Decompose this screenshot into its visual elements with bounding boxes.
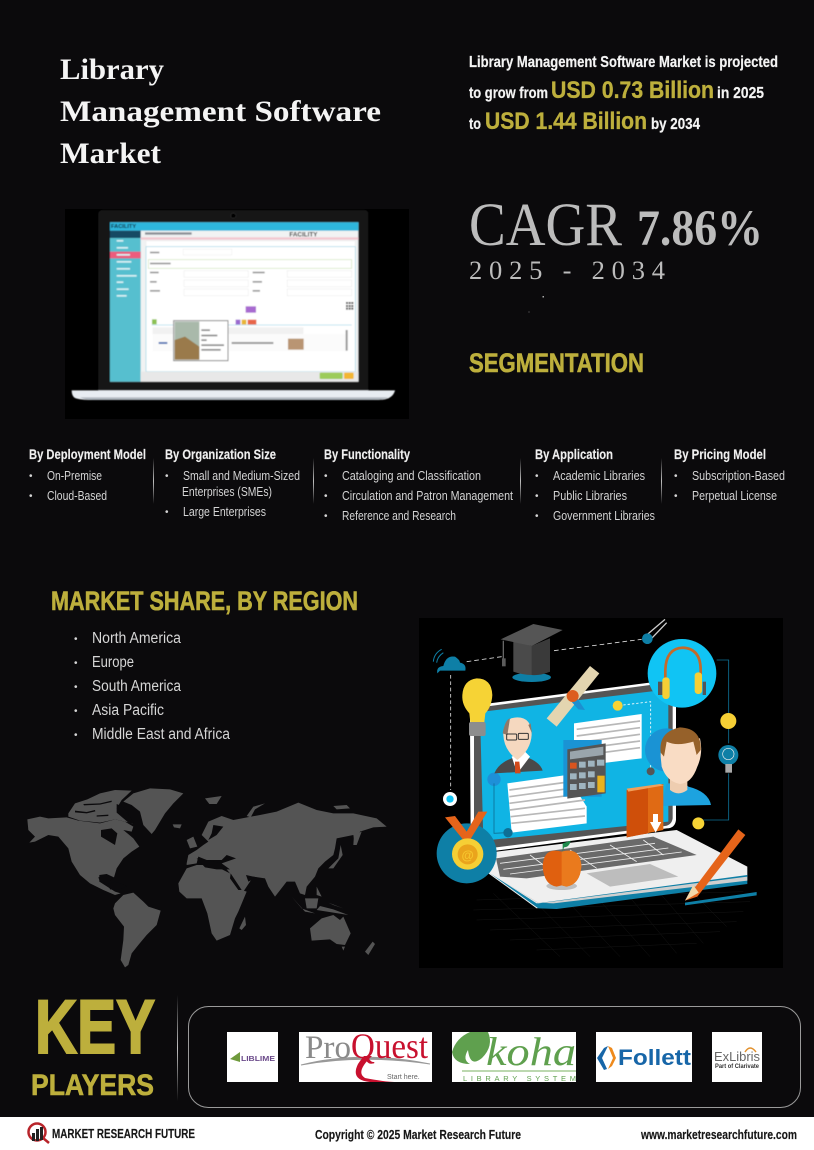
icon: teacher [494, 717, 543, 773]
icon: student [628, 727, 711, 807]
world map [27, 788, 387, 967]
logo: Koha [452, 1029, 576, 1083]
logo: Ex Libris: ExLibris [714, 1049, 760, 1064]
CAGR: CAGR [469, 192, 622, 259]
laptop lid: FACILITY [111, 224, 136, 230]
title: Library [60, 53, 164, 86]
icon: light bulb [462, 678, 492, 736]
segment: organization size: Small and Medium-Sized [183, 469, 300, 483]
icon: diploma scroll [547, 666, 599, 727]
segment: application: Public Libraries [553, 489, 627, 503]
segment: application [535, 446, 655, 523]
icon: pencil [685, 829, 757, 905]
region list: Asia Pacific [92, 702, 164, 719]
logo: ProQuest [299, 1026, 432, 1082]
segment: application: Academic Libraries [553, 469, 645, 483]
segment: functionality: Cataloging and Classification [342, 469, 481, 483]
icon: cloud with wifi and dashed links [433, 639, 642, 806]
heading: segmentation: SEGMENTATION [469, 348, 644, 378]
segment: pricing model: Subscription-Based [692, 469, 785, 483]
market projection text: to [469, 116, 481, 133]
region list: North America [92, 630, 181, 647]
segment: deployment model: • [29, 471, 33, 482]
icon: yellow coin [720, 713, 736, 729]
logo: Koha: koha [486, 1029, 576, 1074]
icon: apple [543, 841, 581, 890]
icon: headphones [648, 639, 729, 820]
market projection text [469, 54, 778, 135]
segment: organization size: Large Enterprises [183, 505, 266, 519]
segment: functionality: Reference and Research [342, 509, 456, 523]
laptop [470, 680, 747, 909]
segment: organization size: Enterprises (SMEs) [182, 485, 272, 499]
segment: organization size: • [165, 471, 169, 482]
documents [507, 714, 642, 833]
region list: Europe [92, 654, 134, 671]
region list: Middle East and Africa [92, 726, 230, 743]
dots and links [487, 701, 655, 837]
market projection text: by 2034 [651, 116, 700, 133]
icon: calculator [563, 740, 606, 799]
segment: pricing model: • [674, 491, 678, 502]
icon: medal: @ [461, 848, 474, 862]
title [60, 53, 381, 170]
region list [74, 630, 230, 743]
logo: ProQuest: Quest [351, 1026, 428, 1066]
logo: Ex Libris [712, 1032, 762, 1082]
region list: • [74, 658, 78, 669]
heading: key players: KEY [35, 985, 155, 1070]
segment: deployment model: Cloud-Based [47, 489, 107, 503]
logo: ProQuest: Pro [305, 1030, 351, 1066]
segment: pricing model [674, 446, 785, 503]
market projection text: to grow from [469, 85, 548, 102]
segment: organization size: • [165, 507, 169, 518]
segment: functionality: By Functionality [324, 446, 410, 462]
market projection text: in 2025 [717, 85, 764, 102]
logo: Ex Libris: Part of Clarivate [715, 1064, 760, 1070]
logo: Koha: LIBRARY SYSTEM [463, 1074, 576, 1083]
segment: functionality: Circulation and Patron Management [342, 489, 513, 503]
logo: LibLime: LIBLIME [241, 1056, 275, 1063]
region list: • [74, 682, 78, 693]
segment: application: Government Libraries [553, 509, 655, 523]
icon: pin [642, 619, 667, 644]
segment: pricing model: • [674, 471, 678, 482]
heading: key players: PLAYERS [31, 1069, 154, 1102]
CAGR [469, 192, 763, 285]
icon: book download [627, 784, 664, 837]
icon: medal [437, 812, 497, 883]
segment: application: • [535, 511, 539, 522]
logo: Follett [596, 1032, 692, 1082]
market projection text: USD 1.44 Billion [485, 108, 647, 135]
segment: organization size: By Organization Size [165, 446, 276, 462]
footer: Copyright © 2025 Market Research Future [315, 1128, 521, 1142]
CAGR: 7.86% [637, 201, 763, 257]
segment: application: • [535, 471, 539, 482]
laptop base [72, 390, 395, 400]
segment: functionality [324, 446, 513, 523]
segment: deployment model: By Deployment Model [29, 446, 146, 462]
segment: functionality: • [324, 491, 328, 502]
panel: laptop screenshot [65, 209, 409, 419]
panel: education laptop illustration [419, 618, 783, 968]
CAGR: 2025 - 2034 [469, 255, 665, 285]
logo: Follett: Follett [618, 1045, 692, 1070]
segment: functionality: • [324, 471, 328, 482]
region list: South America [92, 678, 181, 695]
segment: deployment model: • [29, 491, 33, 502]
region list: • [74, 730, 78, 741]
footer: MARKET RESEARCH FUTURE [52, 1127, 195, 1141]
segment: deployment model: On-Premise [47, 469, 102, 483]
region list: • [74, 634, 78, 645]
title: Market [60, 137, 161, 170]
logo: ProQuest: Start here. [387, 1074, 420, 1081]
region list: • [74, 706, 78, 717]
floor grid [473, 892, 750, 957]
icon: graduation cap [501, 624, 563, 682]
laptop lid: FACILITY [289, 231, 318, 238]
segment: application: • [535, 491, 539, 502]
panel: key players logos [188, 1006, 800, 1108]
title: Management Software [60, 95, 381, 128]
logo: LibLime [227, 1032, 278, 1082]
heading: market share by region: MARKET SHARE, BY REGION [51, 586, 358, 616]
segment: pricing model: By Pricing Model [674, 446, 766, 462]
segment: organization size [165, 446, 300, 519]
laptop lid [98, 210, 368, 391]
icon: market research future logo [28, 1124, 49, 1143]
footer [0, 1117, 814, 1150]
segment: application: By Application [535, 446, 613, 462]
market projection text: USD 0.73 Billion [551, 77, 714, 104]
segment: pricing model: Perpetual License [692, 489, 777, 503]
segment: deployment model [29, 446, 146, 503]
yellow link dot [692, 817, 704, 829]
segment: functionality: • [324, 511, 328, 522]
heading: key players [31, 985, 155, 1102]
icon: small bulb [718, 745, 738, 773]
